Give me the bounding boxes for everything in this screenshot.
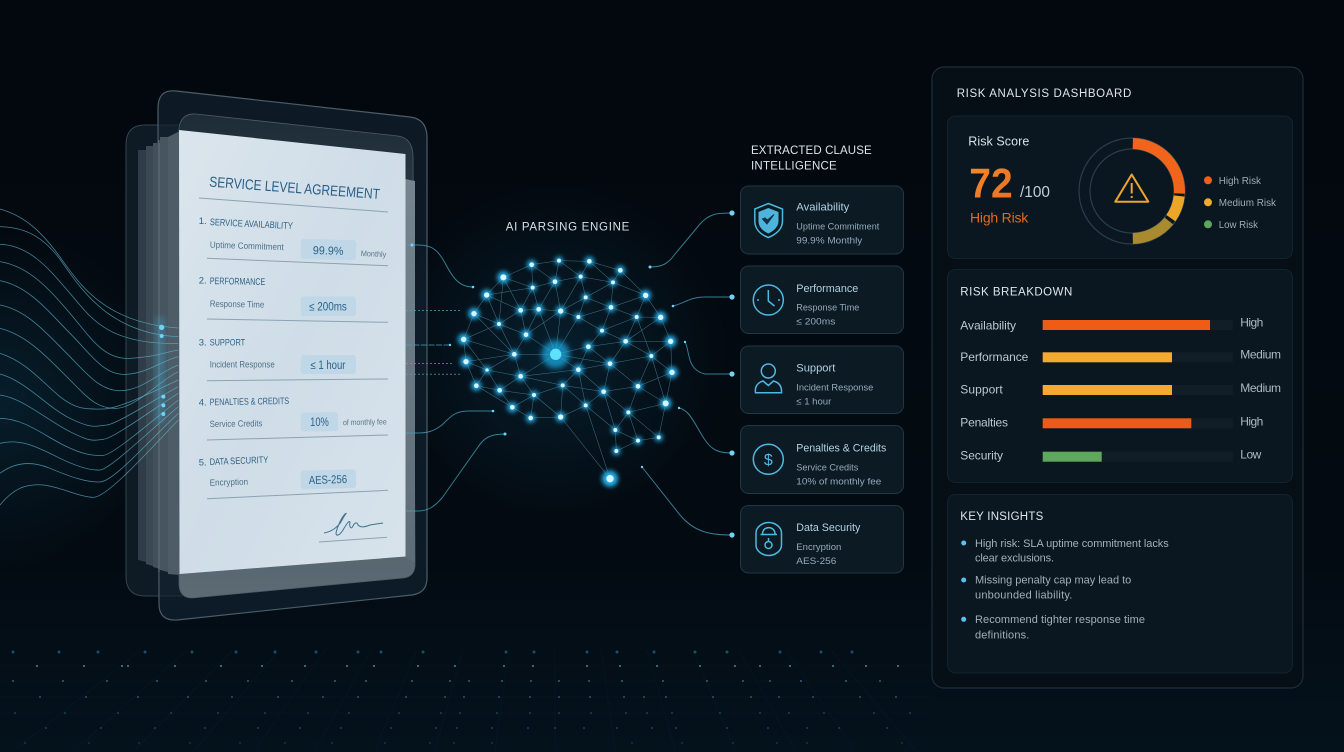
- network nodes: [461, 259, 675, 482]
- icon: lock: [756, 522, 782, 556]
- heading: extracted clause intelligence: INTELLIGENCE: [751, 161, 837, 173]
- insight 1: [961, 538, 1169, 565]
- panel: risk score: Risk Score: [968, 135, 1029, 149]
- insight 3: [961, 614, 1145, 641]
- card: performance: Performance: [796, 283, 858, 295]
- clause 2: [199, 276, 388, 322]
- panel: risk score: [948, 116, 1292, 258]
- panel: risk analysis dashboard: [932, 67, 1303, 688]
- icon: warning triangle: [1115, 174, 1148, 202]
- bar chart: Low: [1240, 448, 1262, 462]
- card: support: Incident Response: [796, 382, 873, 394]
- clause 1: SERVICE AVAILABILITY: [210, 217, 294, 232]
- card: support: Support: [796, 362, 835, 374]
- clause 3: Incident Response: [210, 360, 275, 370]
- card: data security: AES-256: [796, 556, 836, 567]
- clause 4: of monthly fee: [343, 417, 387, 427]
- clause 2: Response Time: [210, 299, 264, 310]
- card: data security: Encryption: [796, 542, 841, 553]
- clause 1: 99.9%: [313, 245, 344, 258]
- legend: Low Risk: [1219, 219, 1259, 231]
- dashboard heading: RISK ANALYSIS DASHBOARD: [957, 88, 1131, 100]
- legend: [1204, 175, 1277, 231]
- panel: risk breakdown: [948, 270, 1292, 482]
- clause 3: ≤ 1 hour: [310, 360, 346, 372]
- card: availability: Availability: [796, 202, 850, 214]
- perspective dot floor: [0, 640, 930, 750]
- clause 4: Service Credits: [210, 418, 263, 429]
- bar chart: Medium: [1240, 347, 1281, 361]
- front glass tablet frame: [158, 91, 427, 620]
- clause 2: ≤ 200ms: [309, 302, 347, 314]
- connectors: engine to clause cards: [641, 210, 735, 538]
- card: availability: [740, 186, 904, 254]
- bar chart: High: [1240, 316, 1263, 330]
- bar chart: [960, 316, 1281, 462]
- insight 2: unbounded liability.: [975, 589, 1072, 601]
- icon: clock: [753, 285, 783, 315]
- bar chart: Penalties: [960, 416, 1008, 430]
- clause 4: PENALTIES & CREDITS: [210, 396, 289, 408]
- icon: dollar: [753, 444, 783, 474]
- clause 3: SUPPORT: [210, 338, 245, 349]
- insight 1: High risk: SLA uptime commitment lacks: [975, 538, 1169, 550]
- clause 1: [199, 216, 388, 266]
- icon: shield: [755, 204, 782, 238]
- card: performance: Response Time: [796, 302, 859, 314]
- clause 2: PERFORMANCE: [210, 276, 265, 288]
- heading: extracted clause intelligence: [751, 145, 872, 173]
- clause 3: 3.: [199, 338, 207, 348]
- insight 2: [961, 575, 1131, 601]
- card: data security: [740, 506, 904, 573]
- card: availability: 99.9% Monthly: [796, 235, 863, 246]
- panel: risk score: /100: [1020, 184, 1050, 201]
- clause 1: Monthly: [361, 249, 386, 259]
- clause 5: DATA SECURITY: [209, 455, 269, 468]
- heading: extracted clause intelligence: EXTRACTED CLAUSE: [751, 145, 872, 157]
- legend: High Risk: [1219, 175, 1262, 187]
- clause 4: 10%: [310, 417, 329, 429]
- network edges: [464, 261, 672, 479]
- page stack: [138, 131, 180, 575]
- insight 2: Missing penalty cap may lead to: [975, 575, 1131, 587]
- bar chart: Security: [960, 448, 1003, 462]
- panel: key insights: [948, 494, 1292, 673]
- node glow: [458, 257, 678, 487]
- insight 3: definitions.: [975, 629, 1029, 641]
- back tablet panel: [126, 125, 182, 596]
- central core node: [542, 340, 570, 368]
- panel: risk score: High Risk: [970, 209, 1029, 225]
- panel: key insights: KEY INSIGHTS: [960, 511, 1044, 523]
- card: penalties and credits: Penalties & Credits: [796, 442, 887, 454]
- bar chart: Medium: [1240, 381, 1281, 395]
- card: performance: ≤ 200ms: [796, 316, 836, 328]
- card: performance: [740, 266, 904, 334]
- insight 3: Recommend tighter response time: [975, 614, 1145, 626]
- incoming data stream lines: [0, 209, 178, 505]
- icon: person: [755, 364, 782, 393]
- neural network brain: [458, 257, 678, 487]
- bar chart: Availability: [960, 318, 1016, 332]
- document: service level agreement: [179, 130, 406, 574]
- bar chart: Performance: [960, 350, 1029, 364]
- bar chart: High: [1240, 414, 1263, 428]
- document title: SERVICE LEVEL AGREEMENT: [209, 175, 381, 203]
- inner tablet plate: [179, 114, 415, 598]
- heading: AI parsing engine: AI PARSING ENGINE: [506, 222, 630, 234]
- card: penalties and credits: 10% of monthly fee: [796, 476, 881, 488]
- connectors: document to engine: [406, 244, 506, 511]
- clause 3: [199, 338, 388, 381]
- card: penalties and credits: Service Credits: [796, 462, 859, 474]
- clause 4: 4.: [199, 398, 207, 408]
- clause 1: 1.: [199, 216, 207, 227]
- clause 2: 2.: [199, 276, 207, 286]
- score value: 72: [969, 160, 1013, 207]
- card: availability: Uptime Commitment: [796, 221, 880, 232]
- legend: Medium Risk: [1219, 197, 1277, 209]
- card: data security: Data Security: [796, 522, 861, 534]
- signature: [319, 513, 387, 542]
- clause 5: 5.: [199, 458, 207, 468]
- panel: risk breakdown: RISK BREAKDOWN: [960, 287, 1072, 299]
- clause 5: Encryption: [209, 477, 248, 488]
- clause 1: Uptime Commitment: [210, 240, 284, 252]
- clause 5: [199, 455, 388, 499]
- clause 4: [199, 396, 388, 440]
- card: support: ≤ 1 hour: [796, 396, 831, 408]
- donut gauge: [1079, 138, 1185, 244]
- bar chart: Support: [960, 383, 1003, 397]
- clause 5: AES-256: [309, 474, 347, 487]
- card: penalties and credits: [740, 426, 904, 494]
- insight 1: clear exclusions.: [975, 553, 1054, 565]
- card: support: [740, 346, 904, 414]
- icon: dollar: $: [764, 452, 773, 469]
